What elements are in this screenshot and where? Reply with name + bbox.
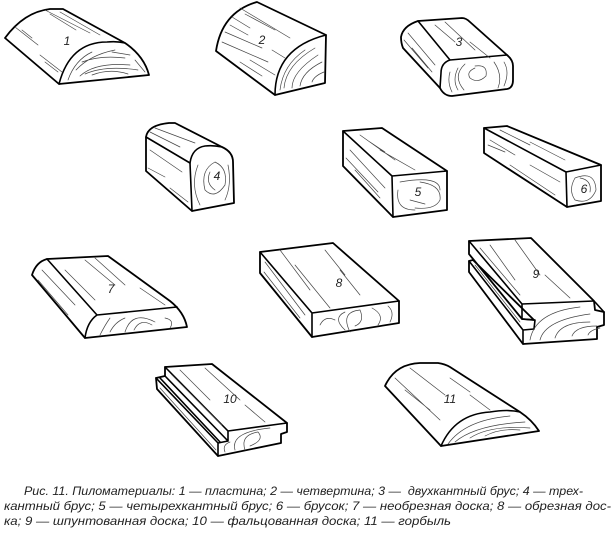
number 9: 9: [533, 267, 540, 281]
caption: Рис. 11. Пиломатериалы: 1 — пластина; 2 — четвертина; 3 — двухкантный брус; 4 — трех-: [24, 486, 583, 498]
item 3: dvukhkantny brus: [401, 18, 513, 96]
caption: кантный брус; 5 — четырехкантный брус; 6 — брусок; 7 — необрезная доска; 8 — обрезная дос-: [4, 501, 611, 513]
number 1: 1: [64, 34, 70, 48]
number 7: 7: [108, 282, 116, 296]
item 5: chetyrekhkantny brus: [343, 128, 447, 217]
item 2: chetvertina: [216, 2, 326, 95]
item 1: plastina: [5, 9, 149, 84]
number 10: 10: [223, 392, 237, 406]
number 11: 11: [444, 392, 456, 406]
number 4: 4: [214, 169, 221, 183]
number 5: 5: [415, 185, 422, 199]
caption: [4, 486, 611, 528]
caption: ка; 9 — шпунтованная доска; 10 — фальцованная доска; 11 — горбыль: [4, 516, 451, 528]
number 6: 6: [581, 182, 588, 196]
item 4: trekhkantny brus: [146, 123, 234, 211]
item 11: gorbyl: [385, 363, 539, 446]
number 8: 8: [336, 276, 343, 290]
item 10: faltsovannaya doska: [156, 364, 287, 456]
item 9: shpuntovannaya doska: [469, 238, 604, 344]
item 6: brusok: [484, 126, 601, 207]
item 8: obreznaya doska: [260, 243, 399, 337]
number 3: 3: [456, 35, 463, 49]
number 2: 2: [258, 33, 266, 47]
item 7: neobreznaya doska: [32, 256, 187, 338]
